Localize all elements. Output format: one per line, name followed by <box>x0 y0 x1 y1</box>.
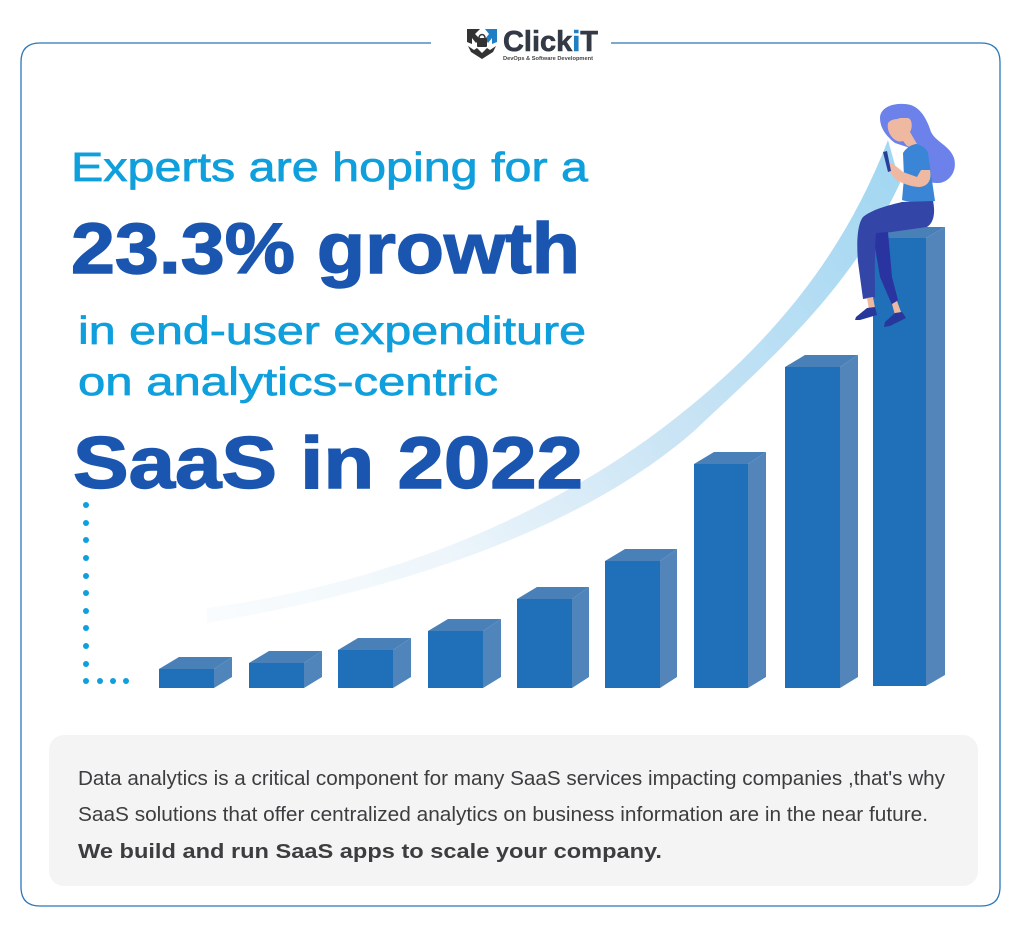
description line 3 bold: We build and run SaaS apps to scale your company. <box>78 840 662 863</box>
heading: SaaS in 2022: SaaS in 2022 <box>73 423 583 504</box>
heading: experts: Experts are hoping for a <box>71 144 588 190</box>
bar 6 <box>605 549 677 688</box>
bar 7 <box>694 452 766 688</box>
hair <box>880 104 955 183</box>
heading: 23.3% growth: 23.3% growth <box>71 210 580 289</box>
panel: description <box>49 735 978 886</box>
bar 5 <box>517 587 589 688</box>
logo tagline: DevOps & Software Development <box>503 56 593 62</box>
bar 2 <box>249 651 322 688</box>
phone <box>883 151 891 172</box>
trousers: outer leg <box>857 201 934 299</box>
description line 1: Data analytics is a critical component for many SaaS services impacting companies ,that's why <box>78 767 946 790</box>
logo: ClickIT <box>467 26 598 62</box>
heading: in end-user expenditure: in end-user expenditure <box>78 310 586 353</box>
bar 1 <box>159 657 232 688</box>
face and neck <box>888 118 917 147</box>
bar 9 <box>873 227 945 686</box>
icon: shield with lock <box>467 29 497 59</box>
description background <box>49 735 978 886</box>
bar 8 <box>785 355 858 688</box>
bar 4 <box>428 619 501 688</box>
illustration: woman sitting on top bar <box>855 104 955 327</box>
description line 2: SaaS solutions that offer centralized analytics on business information are in the near future. <box>78 803 928 826</box>
bar chart <box>159 227 945 688</box>
swoosh growth arrow <box>207 140 900 623</box>
dotted axis <box>83 502 129 684</box>
trousers: inner leg <box>875 232 898 305</box>
heading: on analytics-centric: on analytics-centric <box>78 361 498 404</box>
bar 3 <box>338 638 411 688</box>
ankles <box>867 297 901 315</box>
arm and hands <box>889 163 931 187</box>
logo wordmark: ClickiT <box>503 26 598 58</box>
shirt <box>902 144 935 202</box>
shoes <box>855 307 877 320</box>
